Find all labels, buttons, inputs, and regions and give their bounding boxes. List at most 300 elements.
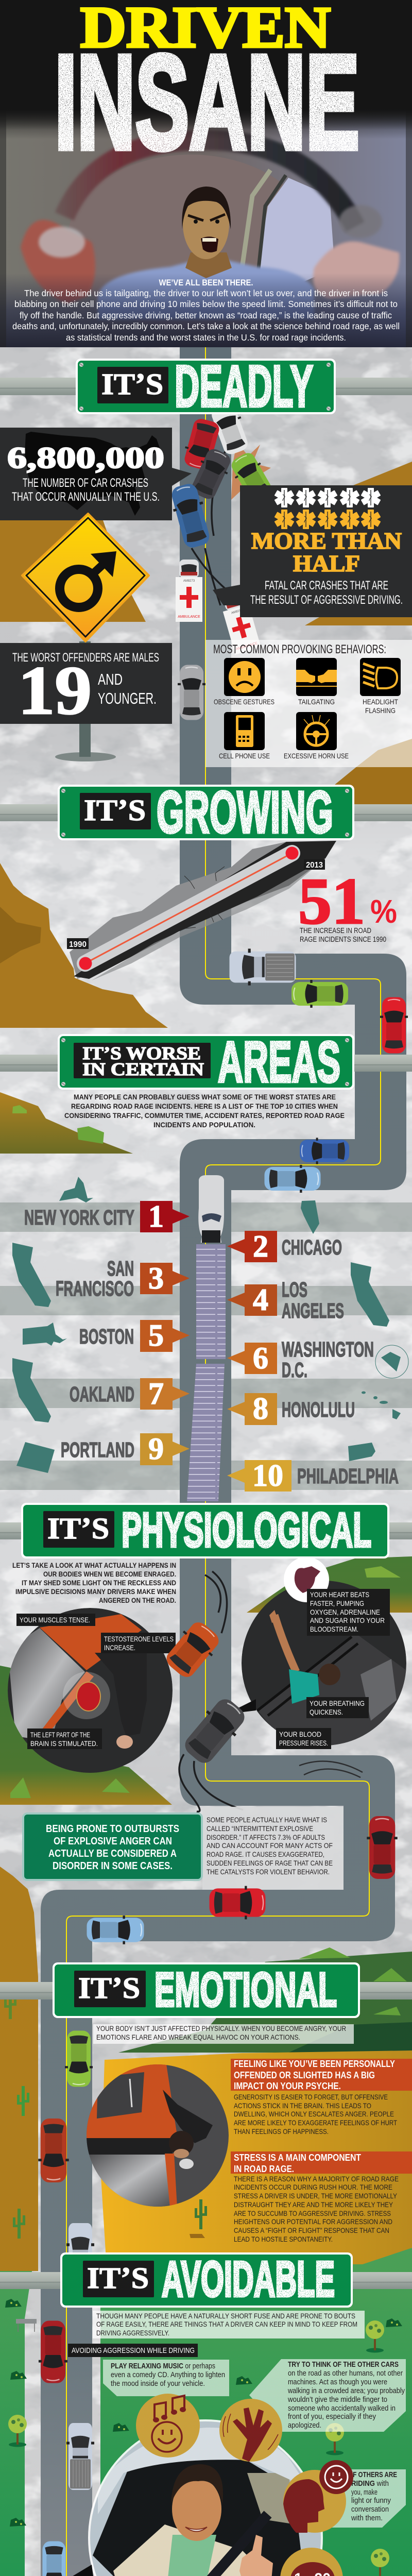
icon: angry face [224,658,265,696]
sign: disorder callout [23,1814,202,1880]
areas intro text: INCIDENTS AND POPULATION. [153,1121,255,1129]
man jacket [163,2090,213,2143]
caption: THAT OCCUR ANNUALLY IN THE U.S. [12,490,160,504]
sign post [55,641,116,761]
label: heart: OXYGEN, ADRENALINE [310,1608,380,1616]
hero intro text: as statistical trends and the worst states in the U.S. for road rage incidents. [66,332,346,343]
raised arm [274,1615,296,1672]
panel: intermittent explosive disorder: DISORDER.” IT AFFECTS 7.3% OF ADULTS [207,1833,325,1841]
caption [250,579,403,607]
panel: worst offenders: YOUNGER. [98,689,157,707]
car: red vertical [380,997,408,1053]
terrain: brown left of emotional [0,1867,38,2271]
trailer rear [187,1364,225,1501]
physiology intro text: LET’S TAKE A LOOK AT WHAT ACTUALLY HAPPENS IN [12,1561,176,1569]
city 4: los angeles: 4 [253,1283,268,1317]
areas intro text: CONSIDERING TRAFFIC, COMMUTER TIME, ACCIDENT RATES, REPORTED ROAD RAGE [64,1111,345,1120]
heading: avoiding aggression [68,2344,198,2357]
terrain: brown right under fatal panel [305,462,412,625]
avoidable intro text: OF RAGE EASILY, THERE ARE THINGS THAT A DRIVER CAN KEEP IN MIND TO KEEP FROM [96,2320,357,2328]
sign: it's deadly [76,354,336,419]
sign: it's physiological [21,1503,389,1558]
icon: tailgating [296,658,337,696]
man hand [174,2149,189,2158]
illustration: driver leaning out of window [242,1581,412,1747]
start dot [79,957,92,970]
car: green [291,980,348,1008]
hero photo panel [0,103,412,347]
it's box: IT’S [87,2261,149,2295]
stat: 51 percent: 51 [298,865,365,938]
usa silhouette [25,432,160,516]
tip: other cars [249,2359,406,2432]
man shirt [165,2535,216,2576]
label: breathing: QUICKENS. [310,1708,343,1716]
road cracks [180,867,225,930]
trees and bushes [5,2299,402,2576]
man face [172,2477,221,2541]
guard rail: physiological [0,1522,412,1539]
road stub under hero [180,347,231,360]
state: california [351,1262,389,1327]
car: red crash [181,416,223,472]
road centre line [66,345,381,2576]
block: offended heading: OFFENDED OR SLIGHTED HAS A BIG [234,2070,375,2080]
tip: others riding: RIDING with [351,2479,389,2488]
emotional intro text [93,2024,354,2044]
city 10: philadelphia [227,1459,399,1493]
car roof [82,2061,178,2139]
city 9: portland: PORTLAND [61,1438,134,1462]
avoidable intro text [93,2311,365,2338]
areas intro text [64,1093,345,1129]
hero intro text: The driver behind us is tailgating, the driver to our left won’t let us over, and the driver in front is [24,288,388,298]
more than half: MORE THAN [251,528,402,554]
tip: other cars: wouldn’t give the middle finger to [287,2395,387,2404]
label: breathing [306,1697,369,1718]
areas intro text: REGARDING ROAD RAGE INCIDENTS. HERE IS A LIST OF THE TOP 10 CITIES WHEN [71,1102,338,1110]
terrain: green lawn [100,2248,412,2576]
city 6: washington dc: D.C. [282,1358,307,1382]
car: pickup clipped by sign [66,2223,94,2295]
rock upper edge [70,842,309,979]
sign: disorder callout: OF EXPLOSIVE ANGER CAN [54,1836,172,1847]
city 4: los angeles [227,1278,344,1323]
city 6: washington dc: 6 [253,1341,268,1375]
car: green crash [227,449,276,504]
physiology intro text: ANGERED ON THE ROAD. [99,1596,176,1604]
leather jacket [95,1653,147,1736]
caption [12,476,160,504]
panel: provoking behaviors: FLASHING [365,706,396,715]
city 3: san francisco: FRANCISCO [56,1277,134,1300]
label: blood pressure: PRESSURE RISES. [279,1739,328,1747]
city 8: honolulu [227,1392,355,1426]
man head [169,2131,194,2156]
car: red sports [209,1886,266,1919]
guard rail: growing [0,804,412,821]
block: offended heading: IMPACT ON YOUR PSYCHE. [234,2081,341,2091]
it's worse box: IT’S WORSE [82,1043,201,1063]
cactus [195,2199,207,2229]
state: oregon [16,1442,55,1473]
silver hood [85,2155,170,2210]
label: testosterone [101,1633,176,1653]
tip: others riding [330,2469,406,2528]
car: dark [179,1693,251,1769]
icon: count to twenty [280,2548,343,2576]
tip: other cars: someone who accidentally walked in [288,2404,396,2413]
it's worse box [74,1043,211,1079]
year 2013: 2013 [306,861,323,870]
trailer front [196,1244,226,1359]
terrain: green right of physiological [247,1556,412,1613]
car: silver [178,665,205,720]
state: california [12,1243,51,1307]
van: light blue [265,1165,320,1193]
label: breathing: YOUR BREATHING [310,1699,365,1707]
state: new york [59,1177,93,1202]
it's box: IT’S [47,1512,109,1545]
car: blue [300,1138,349,1164]
icon: male road sign [22,514,149,641]
ambulance left [176,560,202,622]
sign: it's emotional [53,1962,360,2018]
label: blood pressure [276,1728,331,1749]
state: massachusetts [23,1323,67,1346]
tip: others riding: IF OTHERS ARE [351,2470,397,2479]
hero intro text [12,278,400,343]
van: light blue [41,2541,67,2576]
truck cab [198,1175,224,1243]
right hand [313,242,400,299]
terrain: olive hill with bushes [0,1092,133,1154]
block: stress body [234,2175,399,2243]
city 5: boston [79,1318,190,1352]
state: illinois [301,1200,319,1234]
terrain: dark green right of emotional [118,1947,412,2053]
illustration: stressed driver [82,2061,229,2210]
city 7: oakland [70,1377,190,1411]
label: brain [27,1728,102,1749]
panel: provoking behaviors [205,640,412,767]
driver neck [185,252,232,278]
state: pennsylvania [348,1443,375,1461]
sign: disorder callout: ACTUALLY BE CONSIDERED A [48,1848,177,1859]
age 19: 19 [18,652,92,728]
sign: disorder callout: DISORDER IN SOME CASES. [53,1860,173,1872]
panel: fatal crashes [213,485,412,617]
label: testosterone: TESTOSTERONE LEVELS [104,1635,174,1643]
heart circle [284,1557,329,1602]
tip: others riding: conversation [351,2505,389,2514]
city 2: chicago: CHICAGO [282,1235,342,1259]
terrain: green lawn left [0,2271,32,2576]
car hood [8,1628,85,1741]
label: brain: THE LEFT PART OF THE [30,1731,90,1739]
city 4: los angeles: LOS [282,1278,307,1301]
physiology intro text: IMPULSIVE DECISIONS MANY DRIVERS MAKE WHEN [15,1587,176,1596]
steering wheel [64,140,355,227]
dark band [82,2138,173,2155]
tip: play relaxing music: the mood inside of your vehicle. [111,2379,205,2388]
driver mouth [201,236,218,252]
tip: others riding: with them. [351,2514,383,2522]
label: testosterone: INCREASE. [104,1643,135,1652]
tip: other cars: apologized. [288,2421,321,2430]
van: light blue [87,1916,144,1944]
car: white crash [208,401,252,457]
cactus [13,2209,25,2239]
explosion burst [231,442,271,500]
car: dark crash [187,446,235,502]
ambulance right [218,587,261,655]
panel: intermittent explosive disorder: CALLED “INTERMITTENT EXPLOSIVE [207,1824,313,1833]
it's worse box: IN CERTAIN [82,1059,204,1079]
hero intro text: blabbing on their cell phone and driving 10 miles below the speed limit. Sometimes it’s difficult not to [14,299,398,309]
road [41,345,406,2576]
left hand [21,220,95,304]
stat: 51 percent: % [370,893,397,930]
city 3: san francisco [56,1257,190,1300]
block: offended body: ACTIONS STICK IN THE BRAIN. THIS LEADS TO [234,2102,371,2110]
panel: provoking behaviors: OBSCENE GESTURES [214,698,274,706]
tip: play relaxing music [103,2360,229,2396]
label: heart: AND SUGAR INTO YOUR [310,1616,385,1624]
man jacket [113,2524,288,2576]
city 7: oakland: OAKLAND [70,1382,134,1406]
brain glow [63,1672,110,1719]
end dot [285,847,299,859]
it's box: IT’S [101,367,163,401]
block: stress heading: STRESS IS A MAIN COMPONENT [234,2153,361,2163]
terrain: brown left of chart [0,863,168,1028]
deadly word: DEADLY [175,354,313,419]
driver hair [182,187,231,229]
state: dc in circle [375,1345,408,1378]
terrain: brown right above growing sign [324,739,412,804]
stat: 51 percent [298,865,397,944]
panel: provoking behaviors: EXCESSIVE HORN USE [284,752,349,760]
rock lower edge [92,858,325,980]
pointer to photo [71,2565,93,2576]
hero intro text: WE’VE ALL BEEN THERE. [159,278,253,287]
orange strip [165,2154,177,2208]
crack shadow [74,841,336,979]
sign: it's growing [58,779,354,845]
car: orange red [38,2119,69,2182]
tip: others riding: you, make [351,2488,377,2497]
block: stress heading: IN ROAD RAGE. [234,2164,294,2174]
cactus [4,1989,16,2019]
areas intro text: MANY PEOPLE CAN PROBABLY GUESS WHAT SOME OF THE WORST STATES ARE [74,1093,336,1101]
block: stress heading [231,2151,412,2174]
label: blood pressure: YOUR BLOOD [279,1730,321,1738]
terrain: brown left by deadly sign [0,520,146,622]
medical stars: gold row [274,510,381,529]
label: muscles [16,1614,95,1626]
block: offended body: THAN FEELINGS OF HAPPINESS. [234,2127,329,2136]
tire skid marks [179,448,363,1811]
state: hawaii [362,1391,401,1419]
heading: avoiding aggression: AVOIDING AGGRESSION WHILE DRIVING [72,2346,195,2355]
driver face [183,201,229,259]
man smile [185,2527,207,2532]
tip: play relaxing music: PLAY RELAXING MUSIC or perhaps [111,2362,215,2370]
panel: worst offenders: THE WORST OFFENDERS ARE MALES [12,651,159,665]
panel: provoking behaviors: TAILGATING [298,698,335,706]
block: offended heading [231,2059,412,2091]
panel: intermittent explosive disorder: THE CATALYSTS FOR VIOLENT BEHAVIOR. [207,1868,330,1876]
avoidable intro text: DRIVING AGGRESSIVELY. [96,2329,169,2337]
head [319,1664,340,1685]
teal shirt [289,1669,319,1704]
thumbs up [239,2535,273,2576]
block: offended body [234,2093,397,2136]
city 1: new york city: NEW YORK CITY [24,1206,134,1229]
clenched hand [116,1735,133,1749]
chart: road rage timeline crack [67,841,336,980]
label: brain: BRAIN IS STIMULATED. [30,1739,98,1748]
city 1: new york city: 1 [148,1199,164,1233]
label: heart: BLOODSTREAM. [310,1625,358,1633]
hero fade [0,109,412,130]
physiology intro text: OUR BODIES WHEN WE BECOME ENRAGED. [43,1570,176,1578]
brain [77,1682,100,1711]
roof [98,2428,309,2514]
hero intro text: fly off the handle. But aggressive driving, better known as “road rage,” is the leading cause of traffic [20,310,392,320]
cabin ceiling [70,155,283,285]
caption: THE NUMBER OF CAR CRASHES [23,476,148,490]
block: stress body: LEAD TO HOSTILE SPONTANEITY. [234,2235,333,2243]
icon: horn [296,712,337,750]
cactus [17,2086,29,2116]
year 1990: 1990 [69,940,87,949]
orange roof [40,1614,142,1670]
icon: waving hand [219,2399,282,2462]
panel: car crashes stat [0,428,192,520]
icon: head with smile bubble [283,2460,353,2533]
timeline line [85,853,292,963]
sign: it's worse in certain areas [58,1030,354,1094]
panel: intermittent explosive disorder: SOME PEOPLE ACTUALLY HAVE WHAT IS [207,1816,327,1824]
man hair [171,2464,223,2504]
panel: worst offenders: AND [98,670,123,688]
panel: intermittent explosive disorder [202,1807,344,1890]
city 6: washington dc [227,1337,374,1382]
city 8: honolulu: HONOLULU [282,1398,355,1421]
city 7: oakland: 7 [148,1377,164,1411]
terrain: gold desert [101,2050,412,2268]
guard rail: avoidable [0,2272,412,2289]
guard rail: areas [0,1055,412,1072]
label: heart [307,1589,390,1636]
panel: intermittent explosive disorder: AND CAN ACCOUNT FOR MANY ACTS OF [207,1841,333,1850]
car: orange [161,1617,225,1683]
panel: worst offenders [0,643,172,728]
tip: others riding: light or funny [351,2496,391,2505]
seat belt [178,2514,268,2576]
avoidable intro text: THOUGH MANY PEOPLE HAVE A NATURALLY SHORT FUSE AND ARE PRONE TO BOUTS [96,2312,355,2320]
city 9: portland [61,1432,190,1466]
hero black header [0,0,412,109]
label: muscles: YOUR MUSCLES TENSE. [20,1616,90,1624]
city 5: boston: 5 [148,1318,164,1352]
it's box: IT’S [84,793,146,827]
panel: intermittent explosive disorder: SUDDEN FEELINGS OF RAGE THAT CAN BE [207,1859,333,1867]
car: pickup [230,948,296,986]
state: california [12,1358,51,1422]
timeline track [85,853,292,963]
panel: provoking behaviors: CELL PHONE USE [219,752,270,760]
year 1990 [67,938,89,949]
physiology intro text: IT MAY SHED SOME LIGHT ON THE RECKLESS AND [22,1579,176,1587]
side window [261,178,334,281]
van: blue crash [168,481,213,550]
label: heart: FASTER, PUMPING [310,1599,364,1607]
it's box: IT’S [78,1971,140,2005]
city 2: chicago [227,1229,342,1263]
head rest [247,2473,296,2524]
terrain: green left of physiological [0,1666,172,1805]
tip: play relaxing music: even a comedy CD. Anything to lighten [111,2370,225,2379]
photo: happy driver thumbs up [88,2416,324,2576]
city 10: philadelphia: 10 [252,1459,283,1493]
city 9: portland: 9 [148,1432,164,1466]
more than half [251,528,402,577]
pointer to right circle [226,1699,256,1714]
mirror [179,2159,194,2169]
car: dark red [367,1816,398,1879]
city 1: new york city [24,1199,190,1233]
car body [258,1633,412,1747]
medical stars: white row [274,488,381,507]
city highlight bands [0,1202,412,1490]
car: dark red vertical [39,2320,67,2383]
physiology intro text [12,1561,176,1604]
label: heart: YOUR HEART BEATS [310,1590,369,1599]
more than half: HALF [293,551,360,577]
panel: provoking behaviors: HEADLIGHT [363,698,398,706]
guard rail: emotional [0,1982,412,1999]
city 3: san francisco: SAN [107,1257,134,1280]
icon: headlight [360,658,401,696]
city 3: san francisco: 3 [148,1261,164,1295]
guard rail: deadly [0,378,412,395]
tip: other cars: machines. Act as though you were [288,2378,387,2386]
sign: it's avoidable [60,2251,353,2308]
driver shirt [98,260,314,319]
car: green vertical [65,2031,93,2087]
car interior [93,2458,304,2576]
emotional intro text: EMOTIONS FLARE AND WREAK EQUAL HAVOC ON YOUR ACTIONS. [96,2033,300,2041]
sign: disorder callout: BEING PRONE TO OUTBURSTS [46,1823,179,1835]
city 4: los angeles: ANGELES [282,1299,344,1323]
illustration: angry driver from above [8,1608,173,1773]
window [97,2072,144,2119]
city 8: honolulu: 8 [253,1392,268,1426]
tip: other cars: front of you, especially if they [288,2412,376,2421]
stat: 51 percent: THE INCREASE IN ROAD [300,926,371,935]
city 2: chicago: 2 [253,1229,268,1263]
icon: music and smile [136,2394,200,2458]
icon: cell phone [224,712,265,750]
city 5: boston: BOSTON [79,1325,134,1348]
driver brows [188,214,225,221]
car: pickup [66,2423,94,2490]
photo shading [0,273,412,347]
number: 6,800,000 [7,441,164,474]
